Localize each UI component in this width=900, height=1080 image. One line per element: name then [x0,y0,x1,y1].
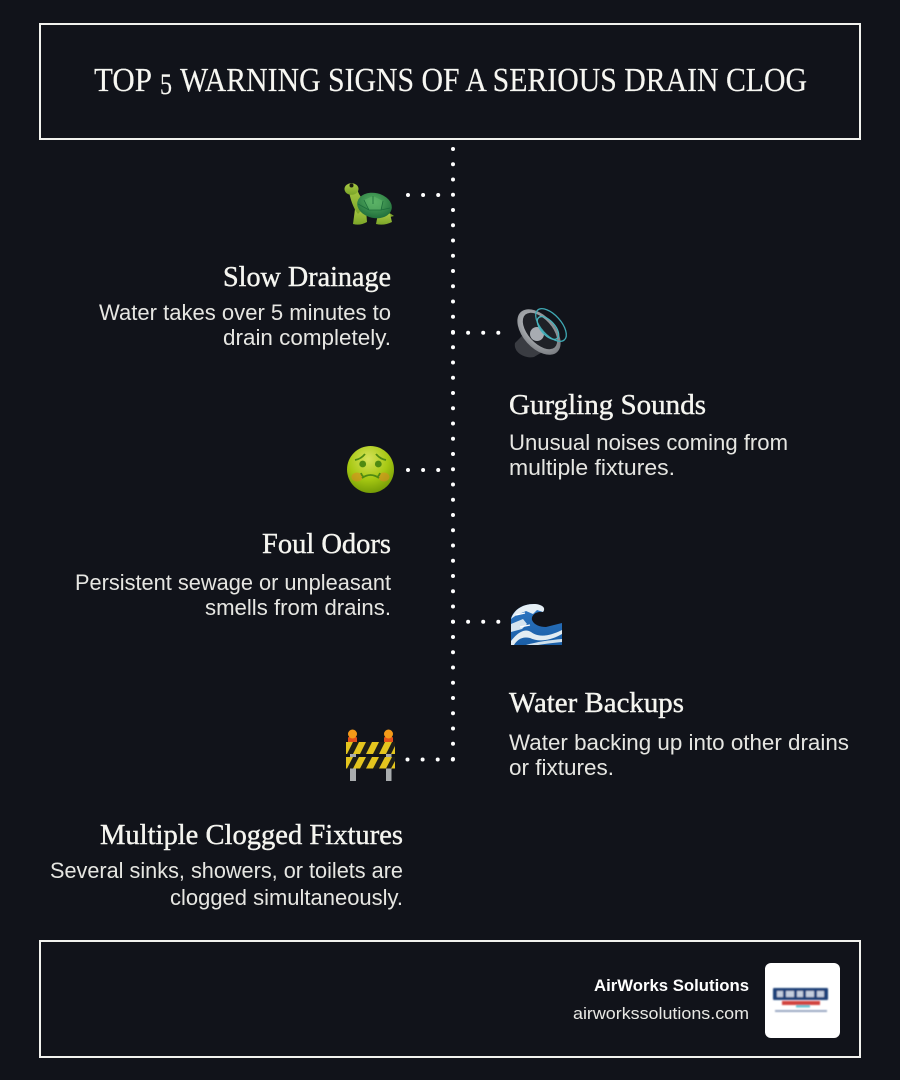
timeline spine [408,149,499,760]
brand name: AirWorks Solutions [594,977,749,995]
description: drain completely. [223,325,391,350]
heading: Gurgling Sounds [509,389,706,421]
heading: Foul Odors [262,528,391,560]
title: WARNING SIGNS OF A SERIOUS DRAIN CLOG [180,62,807,99]
title: 5 [160,68,172,101]
description: Water takes over 5 minutes to [99,300,391,325]
description: Unusual noises coming from [509,430,788,455]
text: gurgling sounds [509,389,788,480]
icon: construction barrier [346,730,395,781]
description: Water backing up into other drains [509,730,849,755]
description: clogged simultaneously. [170,885,403,910]
text: foul odors [75,528,391,620]
description: Persistent sewage or unpleasant [75,570,391,595]
footer panel [40,941,860,1057]
icon: water wave [511,604,562,645]
description [99,300,391,350]
description: or fixtures. [509,755,614,780]
heading: Water Backups [509,687,684,719]
description: multiple fixtures. [509,455,675,480]
description [509,430,788,480]
icon: nauseated face [347,446,394,493]
heading: Multiple Clogged Fixtures [100,819,403,851]
logo [765,963,840,1038]
icon: speaker [509,301,572,363]
text: multiple clogged fixtures [50,819,403,910]
title: TOP [94,62,152,99]
text: water backups [509,687,849,780]
description: Several sinks, showers, or toilets are [50,858,403,883]
text: slow drainage [99,261,391,350]
description [75,570,391,620]
description [509,730,849,780]
header panel [40,24,860,139]
description [50,858,403,910]
icon: turtle [344,183,394,225]
website: airworkssolutions.com [573,1005,749,1023]
description: smells from drains. [205,595,391,620]
heading: Slow Drainage [223,261,391,293]
